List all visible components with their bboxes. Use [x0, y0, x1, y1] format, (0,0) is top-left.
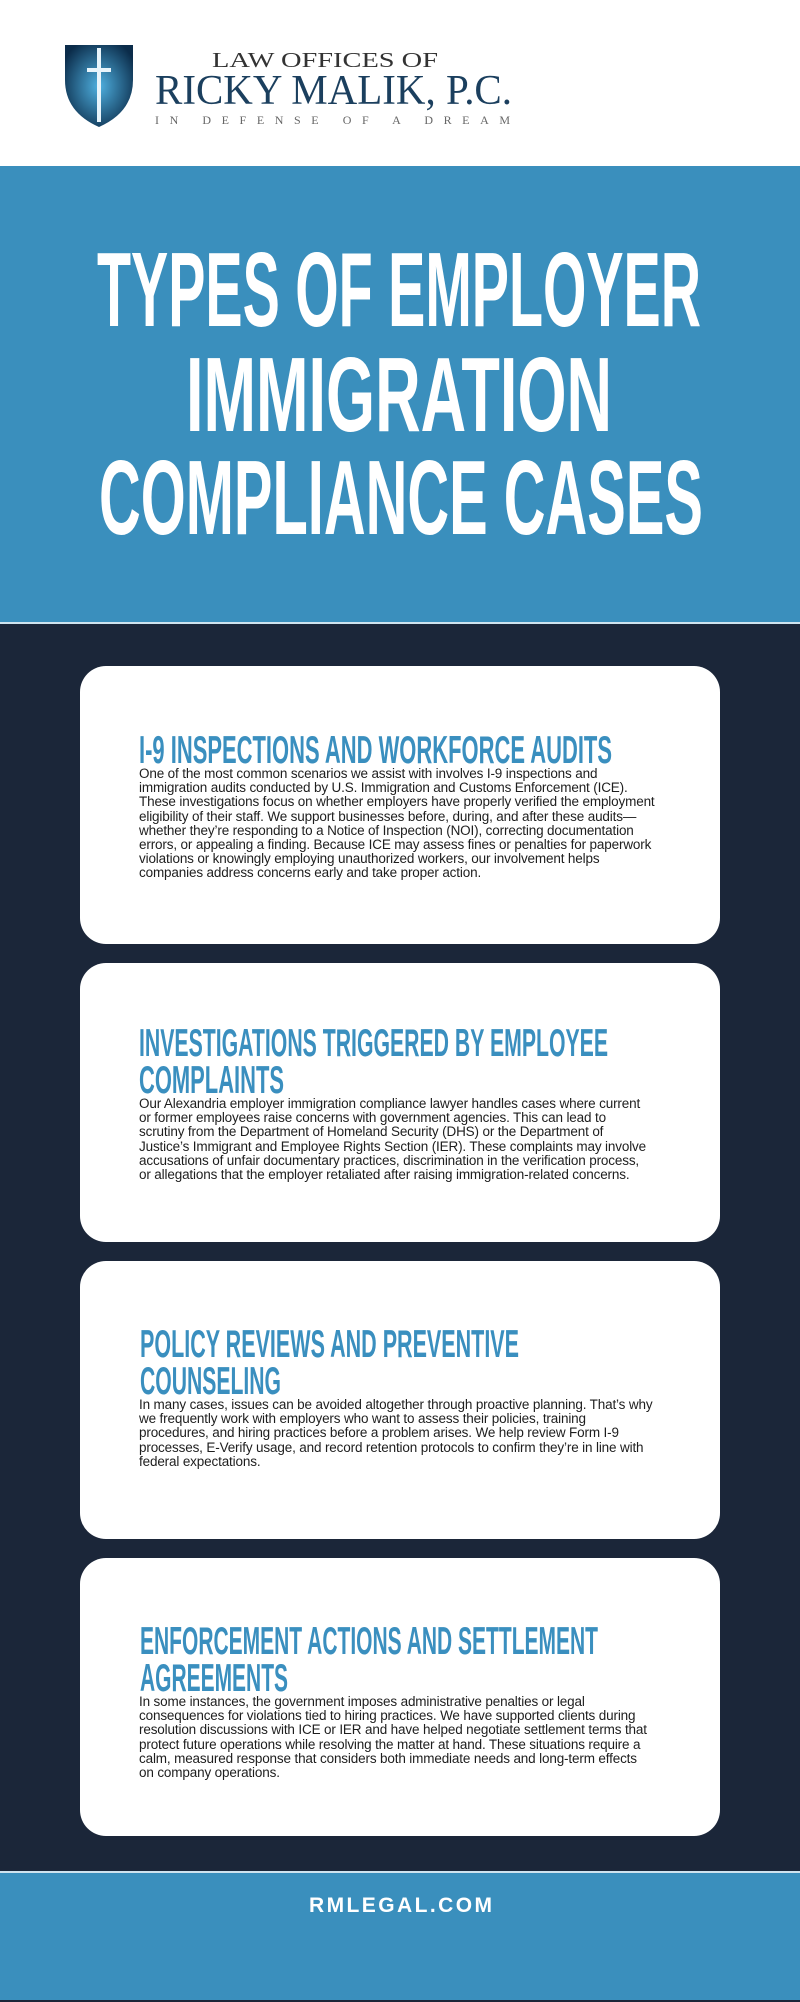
body text: errors, or appealing a finding. Because ICE may assess fines or penalties for paperwork [139, 837, 651, 852]
panel: enforcement actions [80, 1558, 720, 1836]
body text: procedures, and hiring practices before a problem arises. We help review Form I-9 [139, 1425, 619, 1440]
body text: Justice’s Immigrant and Employee Rights Section (IER). These complaints may involve [139, 1139, 646, 1154]
heading [140, 1323, 519, 1401]
body text: or former employees raise concerns with government agencies. This can lead to [139, 1110, 606, 1125]
icon: shield with sword [65, 45, 133, 127]
body text: violations or knowingly employing unauthorized workers, our involvement helps [139, 851, 599, 866]
logo text: RICKY MALIK, P.C. [155, 68, 512, 114]
body text [139, 766, 655, 880]
footer url: RMLEGAL.COM [309, 1894, 492, 1917]
panel: I-9 inspections [80, 666, 720, 944]
body text: eligibility of their staff. We support businesses before, during, and after these audits— [139, 809, 636, 824]
body text: One of the most common scenarios we assist with involves I-9 inspections and [139, 766, 597, 781]
body text: protect future operations while resolving the matter at hand. These situations require a [139, 1737, 640, 1752]
body text: These investigations focus on whether employers have properly verified the employment [139, 794, 655, 809]
logo text [155, 48, 512, 127]
body text: calm, measured response that considers both immediate needs and long-term effects [139, 1751, 637, 1766]
body text: on company operations. [139, 1765, 280, 1780]
body text: or allegations that the employer retaliated after raising immigration-related concerns. [139, 1167, 629, 1182]
body text: In many cases, issues can be avoided altogether through proactive planning. That’s why [139, 1397, 652, 1412]
body text [139, 1694, 647, 1780]
logo text: LAW OFFICES OF [212, 48, 438, 72]
title banner [0, 166, 800, 624]
logo text: IN DEFENSE OF A DREAM [155, 113, 510, 127]
heading [140, 1620, 598, 1698]
body text: accusations of unfair documentary practices, discrimination in the verification process, [139, 1153, 639, 1168]
body text: processes, E-Verify usage, and record retention protocols to confirm they’re in line with [139, 1440, 643, 1455]
body text: federal expectations. [139, 1454, 260, 1469]
body text: whether they’re responding to a Notice of Inspection (NOI), correcting documentation [139, 823, 634, 838]
title [97, 231, 703, 557]
heading: COMPLAINTS [139, 1059, 284, 1102]
body text: resolution discussions with ICE or IER and have helped negotiate settlement terms that [139, 1722, 647, 1737]
header: logo area [0, 0, 800, 166]
heading [139, 1022, 608, 1102]
body text: scrutiny from the Department of Homeland Security (DHS) or the Department of [139, 1124, 603, 1139]
body text: Our Alexandria employer immigration compliance lawyer handles cases where current [139, 1096, 640, 1111]
body text: consequences for violations tied to hiring practices. We have supported clients during [139, 1708, 635, 1723]
body text: In some instances, the government imposes administrative penalties or legal [139, 1694, 585, 1709]
body text: immigration audits conducted by U.S. Immigration and Customs Enforcement (ICE). [139, 780, 628, 795]
logo [65, 45, 512, 127]
body text [139, 1096, 646, 1182]
body text [139, 1397, 653, 1469]
body text: we frequently work with employers who want to assess their policies, training [139, 1411, 586, 1426]
footer [0, 1871, 800, 2000]
panel: policy reviews [80, 1261, 720, 1539]
body text: companies address concerns early and take proper action. [139, 865, 481, 880]
panel: employee complaints [80, 963, 720, 1242]
